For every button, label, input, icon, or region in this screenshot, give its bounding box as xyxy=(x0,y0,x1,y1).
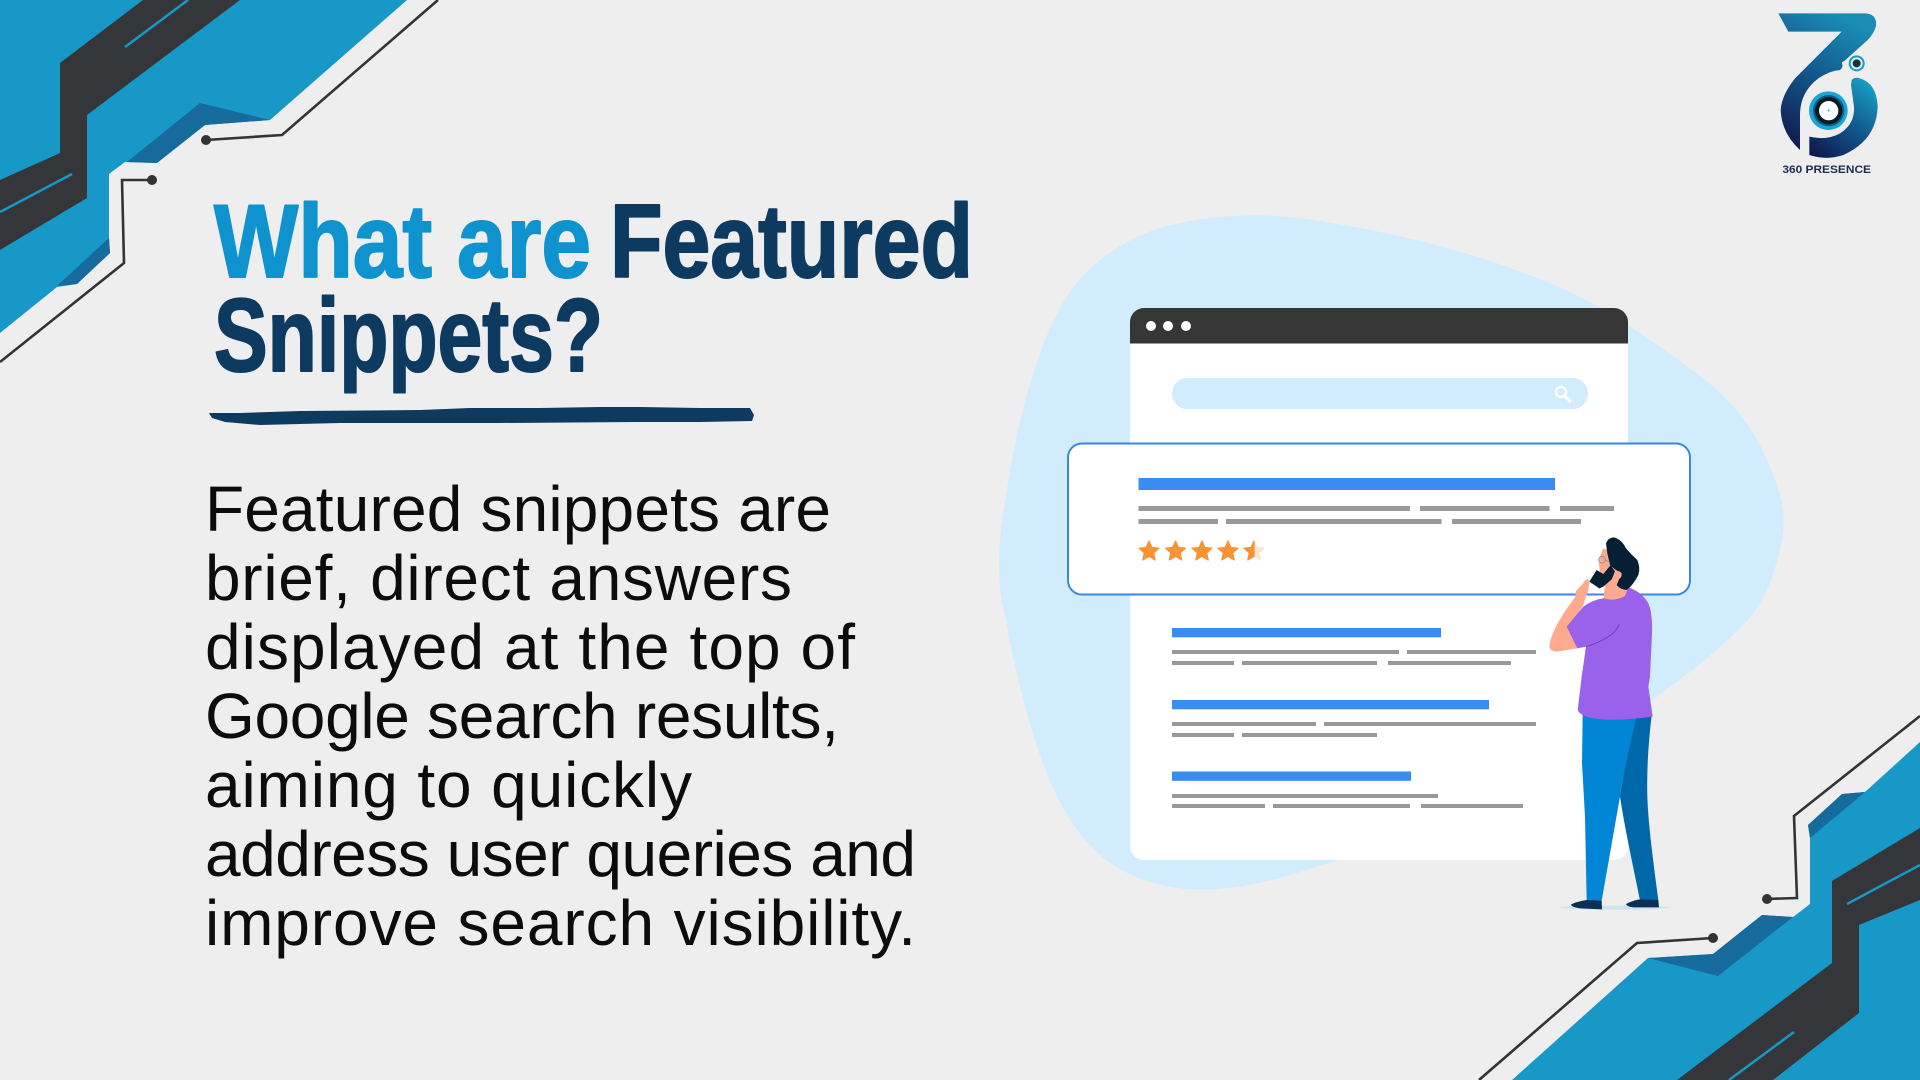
body text: Featured snippets are xyxy=(205,473,831,545)
body text: brief, direct answers xyxy=(205,542,792,614)
browser title bar xyxy=(1130,308,1628,344)
search bar xyxy=(1172,378,1588,409)
ear xyxy=(1614,571,1622,579)
title: Featured xyxy=(610,184,973,300)
back leg xyxy=(1620,715,1658,901)
browser window xyxy=(1130,308,1628,860)
shoes xyxy=(1571,900,1602,909)
body text: address user queries and xyxy=(205,818,916,890)
decoration: top-left corner xyxy=(0,0,438,362)
shadow xyxy=(1560,906,1670,910)
body text xyxy=(205,473,916,959)
body text: improve search visibility. xyxy=(205,887,916,959)
person illustration xyxy=(1549,537,1670,910)
shirt xyxy=(1567,587,1653,720)
neck and face xyxy=(1599,548,1628,601)
result 2 xyxy=(1172,700,1536,737)
title xyxy=(214,184,973,394)
star rating xyxy=(1139,541,1264,560)
hair xyxy=(1606,537,1639,590)
arm xyxy=(1549,578,1589,652)
result 3 xyxy=(1172,772,1523,808)
logo small lens xyxy=(1849,55,1865,71)
beard xyxy=(1589,565,1615,588)
window dots xyxy=(1146,321,1191,331)
sleeve crease xyxy=(1586,624,1619,647)
logo lens xyxy=(1809,91,1848,130)
browser body xyxy=(1130,330,1628,860)
title: What are xyxy=(214,184,591,300)
background blob xyxy=(999,215,1784,890)
glasses xyxy=(1599,556,1610,563)
logo text: 360 PRESENCE xyxy=(1782,164,1871,176)
body text: displayed at the top of xyxy=(205,611,855,683)
body text: Google search results, xyxy=(205,680,839,752)
body text: aiming to quickly xyxy=(205,749,692,821)
icon: search xyxy=(1556,387,1571,402)
logo arc xyxy=(1809,78,1878,158)
snippet text lines xyxy=(1138,506,1614,524)
brush underline xyxy=(209,407,754,425)
decoration: bottom-right corner xyxy=(1479,716,1920,1080)
logo seven xyxy=(1778,13,1876,150)
logo xyxy=(1778,13,1878,176)
snippet heading bar xyxy=(1138,478,1555,490)
result 1 xyxy=(1172,628,1536,665)
featured snippet card xyxy=(1068,444,1690,594)
front leg xyxy=(1582,713,1636,901)
title: Snippets? xyxy=(214,278,603,394)
